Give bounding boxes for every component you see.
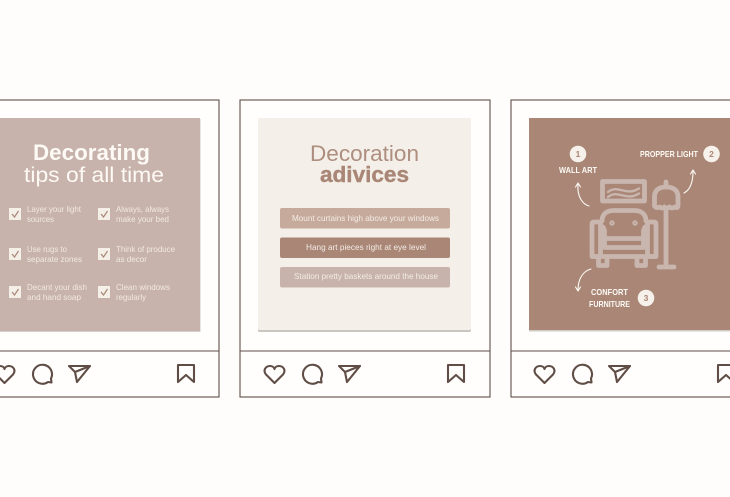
icon: floor lamp (654, 182, 678, 267)
heading: decoration advices: adivices (320, 162, 409, 187)
arrow: to comfort furniture (576, 269, 591, 291)
tip: clean windows regularly: Clean windows (116, 282, 170, 292)
tip: think of produce as decor: Think of produce (116, 244, 175, 254)
callout 3: confort furniture: FURNITURE (589, 299, 630, 309)
arrow: to propper light (684, 170, 696, 193)
callout 2: propper light: 2 (709, 149, 714, 159)
icon: wall picture (602, 182, 644, 201)
tip: clean windows regularly: regularly (116, 292, 147, 302)
advice pill: hang art pieces: Hang art pieces right at eye level (306, 242, 426, 252)
tip: always make your bed (98, 204, 169, 224)
tip: decant your dish and hand soap: Decant your dish (27, 282, 87, 292)
advice pill: hang art pieces (280, 238, 450, 258)
tip: use rugs to separate zones: separate zones (27, 254, 82, 264)
post card 2: decoration advices (240, 100, 490, 397)
panel: decoration advices (258, 118, 471, 332)
callout 2: propper light: PROPPER LIGHT (640, 149, 699, 159)
icon row: like, comment, share, save (535, 365, 730, 384)
tip: decant your dish and hand soap (9, 282, 87, 302)
advice pill: station pretty baskets (280, 267, 450, 288)
arrow: to wall art (576, 183, 589, 206)
callout 3: confort furniture: CONFORT (591, 287, 629, 297)
tip: think of produce as decor (98, 244, 175, 264)
tip: layer your light sources (9, 204, 82, 224)
heading: decoration advices: Decoration (310, 141, 419, 166)
tip: think of produce as decor: as decor (116, 254, 147, 264)
callout 2: propper light (640, 146, 720, 162)
post card 3: furniture diagram (511, 100, 730, 397)
tip: always make your bed: Always, always (116, 204, 169, 214)
callout 1: wall art (559, 146, 598, 175)
heading: decoration advices (310, 141, 419, 187)
icon: armchair (592, 210, 656, 266)
panel: room diagram (529, 118, 730, 332)
icon row: like, comment, share, save (0, 365, 194, 384)
tip: layer your light sources: sources (27, 214, 54, 224)
advice pill: station pretty baskets: Station pretty baskets around the house (294, 271, 438, 281)
tip: use rugs to separate zones (9, 244, 82, 264)
heading: decorating tips of all time (24, 140, 164, 187)
tip: use rugs to separate zones: Use rugs to (27, 244, 67, 254)
icon row: like, comment, share, save (265, 365, 464, 384)
advice pill: mount curtains: Mount curtains high above your windows (292, 213, 439, 223)
post card 1: decorating tips (0, 100, 219, 397)
callout 1: wall art: 1 (576, 149, 581, 159)
advice pill: mount curtains (280, 208, 450, 228)
callout 3: confort furniture (589, 287, 654, 309)
callout 3: confort furniture: 3 (644, 293, 649, 303)
tip: layer your light sources: Layer your light (27, 204, 82, 214)
callout 1: wall art: WALL ART (559, 165, 598, 175)
tip: decant your dish and hand soap: and hand soap (27, 292, 81, 302)
heading: decorating tips of all time: tips of all time (24, 164, 164, 187)
panel: decorating tips (0, 118, 200, 332)
heading: decorating tips of all time: Decorating (33, 140, 150, 165)
tip: clean windows regularly (98, 282, 170, 302)
tip: always make your bed: make your bed (116, 214, 169, 224)
